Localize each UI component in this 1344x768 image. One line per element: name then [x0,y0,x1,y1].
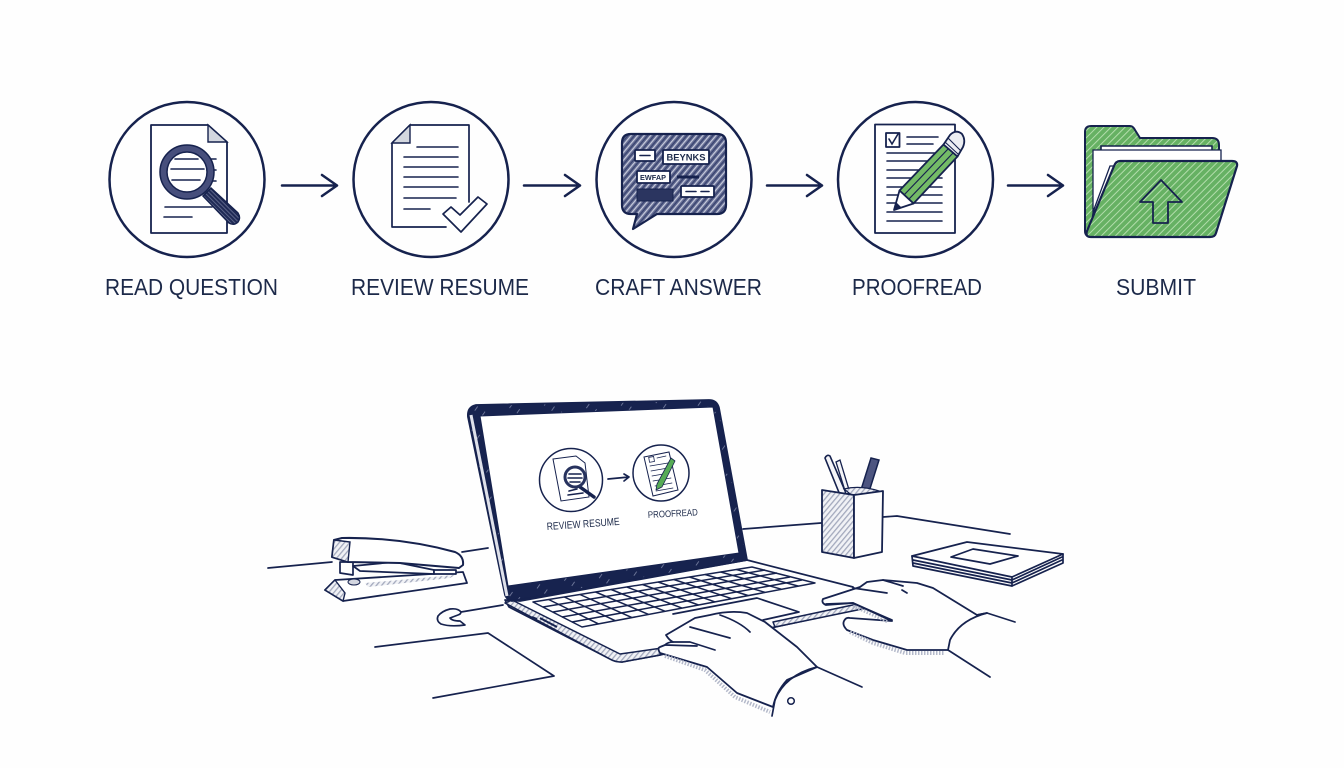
label: proofread: PROOFREAD [852,274,982,300]
right hand and sleeve [822,580,1015,677]
icon circle: craft answer [596,102,752,257]
icon: resume with check mark [392,125,487,232]
pen cup [822,455,883,558]
mini arrow [608,474,629,481]
mini icon: document with pencil [633,445,689,501]
keyboard [533,567,815,627]
icon: speech bubble with answer blocks: EWFAP [640,173,666,182]
arrow 4 [1008,175,1063,196]
step 2: review resume [351,102,529,300]
desk edge lines [268,516,1010,568]
notebooks [912,542,1063,586]
step 5: submit [1085,126,1237,300]
mini icon: document with magnifier [540,448,602,512]
icon circle: proofread [838,102,993,257]
step 3: craft answer [595,102,762,300]
laptop [468,400,867,662]
icon: speech bubble with answer blocks [622,134,726,229]
mini label: review resume: REVIEW RESUME [546,516,620,533]
left hand and sleeve [658,612,862,716]
paper clip and cable [437,605,503,626]
illustration: desk scene [268,400,1063,716]
mini flow on screen [540,445,698,533]
icon circle: review resume [354,102,508,257]
arrow 2 [524,175,580,196]
laptop lid and bezel [468,400,747,601]
label: review resume: REVIEW RESUME [351,274,529,300]
arrow 1 [282,175,337,196]
laptop screen [480,407,739,586]
icon: document with magnifying glass [151,125,240,233]
arrow 3 [767,175,822,196]
step 1: read question [105,102,278,300]
paper sheet on desk [375,633,554,698]
icon circle: read question [110,102,264,257]
trackpad [673,598,799,620]
icon: document with green pencil [875,124,964,233]
label: craft answer: CRAFT ANSWER [595,274,762,300]
step 4: proofread [838,102,993,300]
icon: green folder with upload arrow [1085,126,1237,237]
icon: speech bubble with answer blocks: BEYNKS [666,152,706,162]
label: read question: READ QUESTION [105,274,278,300]
mini label: proofread: PROOFREAD [648,507,698,521]
laptop base [505,560,867,662]
stapler [325,538,467,601]
label: submit: SUBMIT [1116,274,1196,300]
